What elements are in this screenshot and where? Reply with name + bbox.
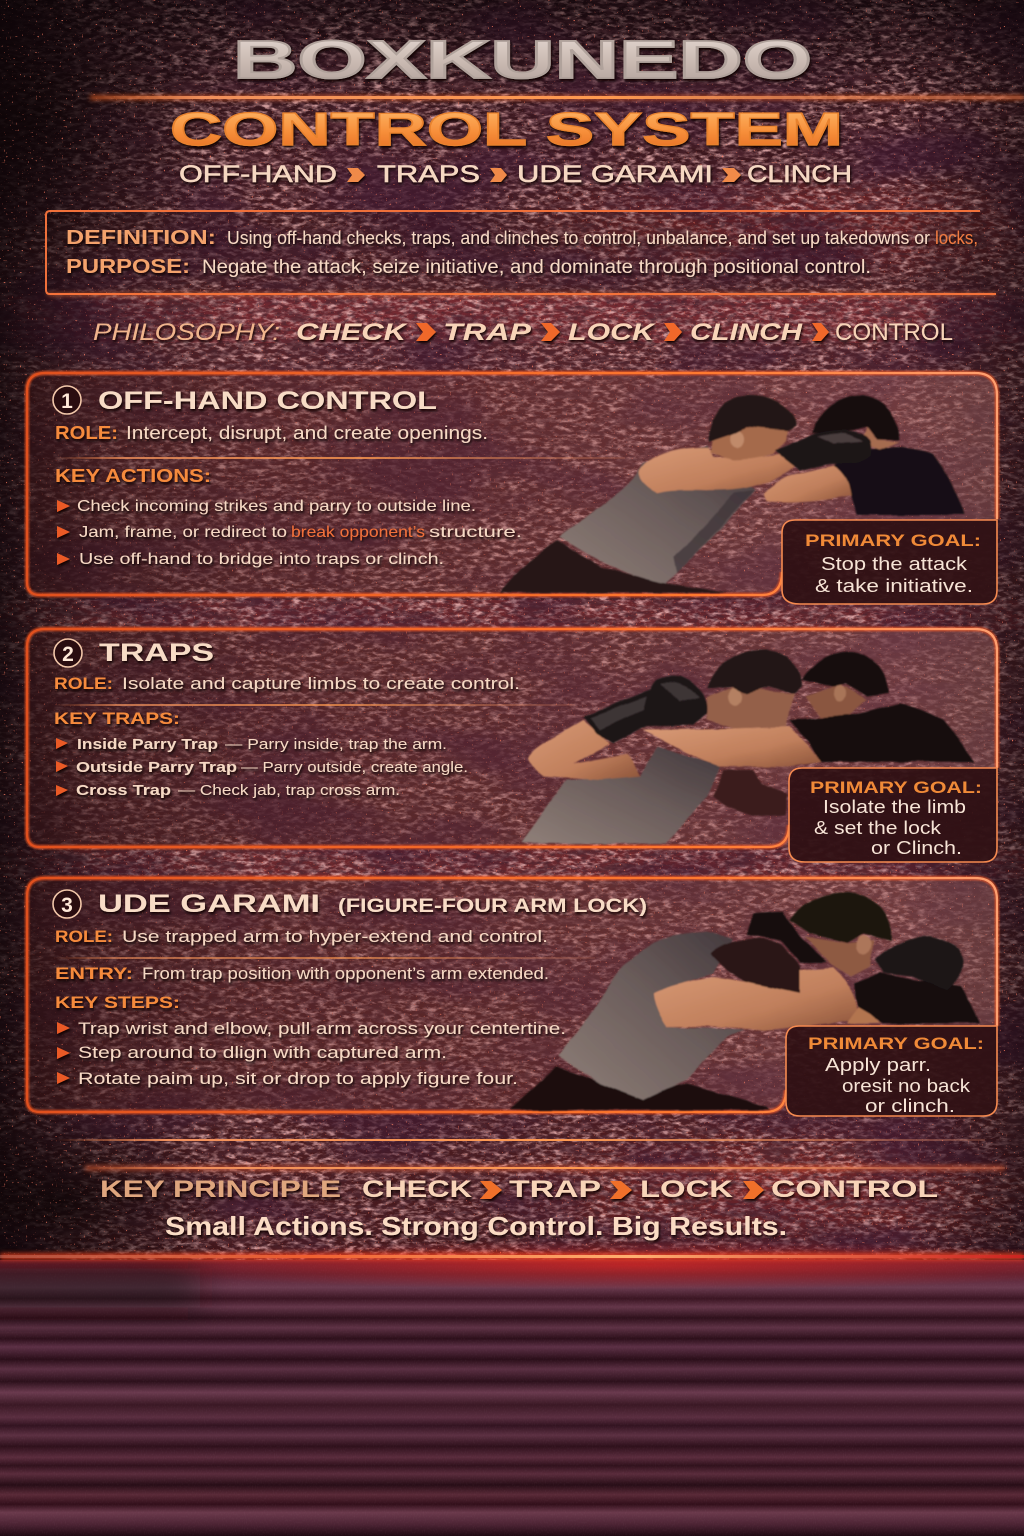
primary goal callout: Apply parr. [825,1055,931,1075]
role line: ROLE: [54,674,113,693]
panel heading [98,890,647,918]
key principle strip [100,1176,938,1203]
panel heading: TRAPS [99,639,214,667]
illustration: fighters clashing, off-hand check [500,395,964,593]
progression strip: OFF-HAND [179,161,337,188]
key principle strip: KEY PRINCIPLE [100,1176,341,1203]
key traps list: — Check jab, trap cross arm. [178,782,400,799]
panel number 1: 1 [61,390,73,413]
philosophy strip: PHILOSOPHY: [93,319,280,346]
key actions list: KEY ACTIONS: [55,466,211,486]
progression strip: CLINCH [747,161,852,188]
role line: ROLE: [55,927,113,946]
role line [55,927,548,946]
philosophy strip: CONTROL [835,319,953,346]
role line: Use trapped arm to hyper-extend and control. [122,927,548,946]
illustration: fighters, arm trap [522,650,975,843]
primary goal callout [789,768,997,862]
definition text: Using off-hand checks, traps, and clinches to control, unbalance, and set up takedowns or [227,228,930,248]
footer rules [55,1139,1005,1171]
tagline: Small Actions. Strong Control. Big Results. [165,1211,787,1241]
panel frame [27,878,997,1116]
primary goal callout [786,1026,997,1116]
philosophy strip: CLINCH [690,319,803,346]
panel number 3 [53,890,81,918]
role line: Intercept, disrupt, and create openings. [126,423,488,443]
philosophy strip [93,319,953,346]
primary goal callout: & take initiative. [815,576,973,596]
role line: Isolate and capture limbs to create control. [122,674,520,693]
title: BOXKUNEDO: BOXKUNEDO [233,30,812,90]
primary goal callout: PRIMARY GOAL: [805,531,981,550]
primary goal callout: & set the lock [814,818,942,838]
key principle strip: CHECK [362,1176,473,1203]
panel number 1 [53,386,81,414]
key traps list: — Parry outside, create angle. [241,759,468,776]
key actions list [55,466,522,568]
role line: ROLE: [55,423,118,443]
key principle strip: CONTROL [771,1176,938,1203]
panel 1: off-hand control [27,373,997,604]
panel number 2: 2 [62,643,74,666]
primary goal callout: Isolate the limb [823,797,966,817]
key actions list: break opponent’s [291,524,425,541]
key actions list: Jam, frame, or redirect to [79,524,287,541]
definition text: locks, [935,228,978,248]
title rule [90,95,1024,100]
striped lower band [0,1260,1024,1536]
panel number 3: 3 [61,894,73,917]
panel frame [27,629,997,862]
key steps list [55,993,566,1088]
panel frame [27,373,997,604]
primary goal callout: Stop the attack [821,554,968,574]
key steps list: Step around to dlign with captured arm. [78,1043,447,1062]
entry line: From trap position with opponent’s arm extended. [142,964,549,983]
key traps list: Cross Trap [76,782,171,799]
panel 3: ude garami [27,878,997,1116]
progression strip: UDE GARAMI [517,161,713,188]
progression strip: TRAPS [377,161,480,188]
primary goal callout [782,520,997,604]
subtitle: CONTROL SYSTEM: CONTROL SYSTEM [170,103,843,155]
philosophy strip: CHECK [296,319,408,346]
role line [54,674,520,693]
primary goal callout: or Clinch. [871,838,962,858]
progression strip [179,161,852,188]
key actions list: Check incoming strikes and parry to outside line. [77,498,476,515]
primary goal callout: oresit no back [842,1076,971,1096]
panel number 2 [54,639,82,667]
key steps list: KEY STEPS: [55,993,180,1012]
panel heading: UDE GARAMI [98,890,320,918]
key principle strip: LOCK [640,1176,734,1203]
key traps list: Outside Parry Trap [76,759,237,776]
primary goal callout: PRIMARY GOAL: [810,778,982,797]
panel heading: (FIGURE-FOUR ARM LOCK) [338,896,647,917]
key steps list: Rotate paim up, sit or drop to apply figure four. [78,1069,518,1088]
key actions list: structure. [429,524,522,541]
entry line: ENTRY: [55,964,133,983]
purpose text: Negate the attack, seize initiative, and dominate through positional control. [202,257,871,278]
panel 2: traps [27,629,997,862]
philosophy strip: LOCK [568,319,656,346]
key traps list: — Parry inside, trap the arm. [225,736,447,753]
glowing bottom rule [0,1240,1024,1290]
panel: definition and purpose [46,211,996,296]
key steps list: Trap wrist and elbow, pull arm across your centertine. [78,1019,566,1038]
definition text: DEFINITION: [66,227,216,249]
philosophy strip: TRAP [443,319,532,346]
illustration: fighters, figure-four arm lock [510,893,980,1110]
key principle strip: TRAP [509,1176,601,1203]
purpose text: PURPOSE: [66,256,190,278]
key traps list: Inside Parry Trap [77,736,218,753]
primary goal callout: or clinch. [865,1096,955,1116]
key traps list: KEY TRAPS: [54,709,180,728]
key actions list: Use off-hand to bridge into traps or clinch. [79,551,444,568]
primary goal callout: PRIMARY GOAL: [808,1034,984,1053]
key traps list [54,709,468,799]
panel heading: OFF-HAND CONTROL [98,387,437,415]
